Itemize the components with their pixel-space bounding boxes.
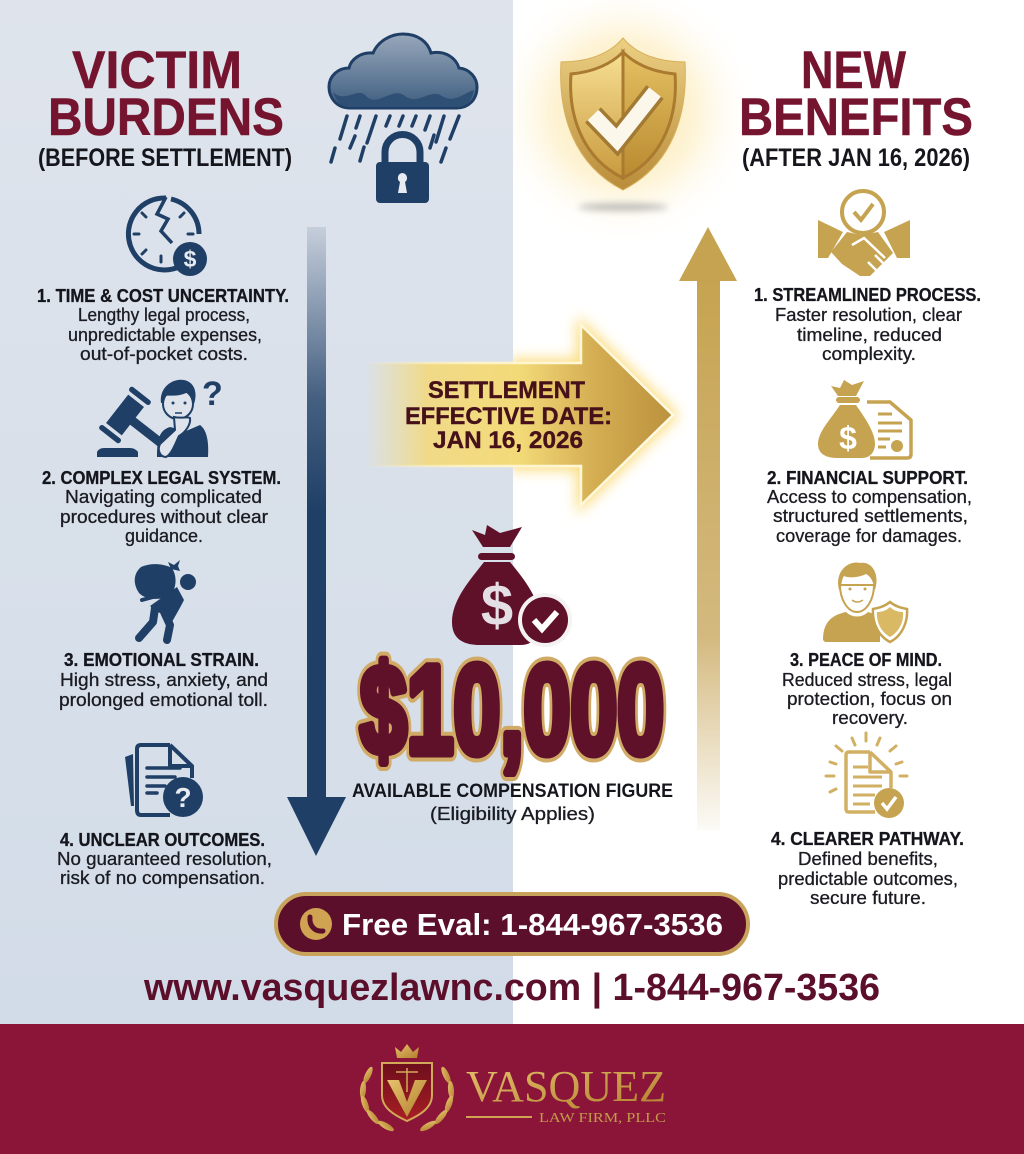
caption: compensation figure [352, 781, 673, 824]
item 4: clearer pathway: secure future. [810, 888, 926, 908]
item 1: time and cost uncertainty: Lengthy legal process, [78, 305, 250, 325]
heading: victim burdens [38, 41, 292, 172]
website and phone: www.vasquezlawnc.com | 1-844-967-3536 [143, 967, 880, 1009]
icon: broken clock with dollar: $ [184, 246, 197, 272]
icon: gold shield glow [516, 5, 730, 220]
icon: gavel and confused person [97, 375, 223, 465]
item 1: time and cost uncertainty [37, 286, 289, 364]
heading: new benefits: (AFTER JAN 16, 2026) [742, 144, 970, 172]
item 1: streamlined process [754, 285, 981, 364]
arrow: settlement effective date [365, 325, 673, 505]
item 4: unclear outcomes [57, 830, 272, 888]
logo: vasquez law firm emblem [359, 1044, 455, 1133]
item 3: peace of mind: 3. PEACE OF MIND. [790, 650, 942, 670]
item 2: financial support [767, 468, 972, 546]
item 2: financial support: coverage for damages. [776, 526, 962, 546]
panel background: before settlement [0, 0, 513, 1024]
item 4: clearer pathway: 4. CLEARER PATHWAY. [771, 829, 964, 849]
item 3: emotional strain [59, 650, 268, 710]
figure: $10,000: $10,000 [360, 641, 664, 780]
heading: new benefits: BENEFITS [739, 88, 973, 147]
item 2: complex legal system: Navigating complicated [65, 487, 262, 507]
item 2: complex legal system [42, 468, 281, 546]
item 2: financial support: structured settlements, [773, 506, 968, 526]
icon: money bag and document: $ [839, 420, 857, 456]
arrow: descending navy arrow [287, 227, 346, 856]
item 3: peace of mind: protection, focus on [787, 689, 952, 709]
icon: gold shield with check [561, 38, 685, 190]
item 3: emotional strain: High stress, anxiety, and [60, 670, 268, 690]
item 2: complex legal system: procedures without clear [60, 507, 268, 527]
caption: compensation figure: AVAILABLE COMPENSATION FIGURE [352, 781, 673, 802]
item 3: emotional strain: prolonged emotional toll. [59, 690, 268, 710]
icon: gavel and confused person: ? [202, 375, 223, 413]
heading: victim burdens: BURDENS [48, 88, 284, 147]
item 2: complex legal system: guidance. [125, 526, 203, 546]
logo: firm name: VASQUEZ [466, 1062, 666, 1111]
item 4: clearer pathway [771, 829, 964, 908]
item 1: time and cost uncertainty: 1. TIME & COST UNCERTAINTY. [37, 286, 289, 306]
logo: firm name: LAW FIRM, PLLC [539, 1111, 666, 1126]
item 1: streamlined process: Faster resolution, clear [775, 305, 962, 325]
arrow: settlement effective date: EFFECTIVE DATE: [405, 403, 612, 430]
icon: broken clock with dollar [128, 197, 207, 276]
arrow: settlement date glow [513, 325, 673, 505]
item 3: emotional strain: 3. EMOTIONAL STRAIN. [64, 650, 259, 670]
icon: person with shield [823, 562, 907, 642]
item 1: streamlined process: complexity. [822, 344, 916, 364]
item 3: peace of mind [782, 650, 952, 728]
heading: new benefits: NEW [801, 41, 906, 100]
item 2: financial support: 2. FINANCIAL SUPPORT. [767, 468, 968, 488]
icon: rain cloud and padlock [329, 34, 477, 203]
item 1: streamlined process: timeline, reduced [797, 325, 942, 345]
icon: money bag and document [818, 380, 911, 458]
item 4: unclear outcomes: No guaranteed resolution, [57, 849, 272, 869]
item 4: clearer pathway: predictable outcomes, [778, 869, 958, 889]
button: free evaluation phone number [276, 894, 748, 954]
item 2: complex legal system: 2. COMPLEX LEGAL SYSTEM. [42, 468, 281, 488]
item 3: peace of mind: recovery. [832, 708, 908, 728]
item 3: peace of mind: Reduced stress, legal [782, 670, 952, 690]
heading: victim burdens: (BEFORE SETTLEMENT) [38, 144, 292, 172]
icon: money bag with check [452, 525, 572, 647]
panel background: after settlement [513, 0, 1024, 1024]
heading: new benefits [739, 41, 973, 172]
item 1: time and cost uncertainty: out-of-pocket costs. [80, 344, 248, 364]
figure: $10,000: $10,000 [360, 641, 664, 780]
footer band [0, 1024, 1024, 1154]
arrow: settlement effective date: JAN 16, 2026 [433, 427, 583, 454]
heading: victim burdens: VICTIM [72, 41, 242, 100]
icon: clock and handshake [818, 191, 910, 276]
icon: money bag with check: $ [481, 573, 513, 638]
icon: document with question mark [125, 745, 203, 817]
icon: document with question mark: ? [174, 782, 192, 813]
item 1: streamlined process: 1. STREAMLINED PROCESS. [754, 285, 981, 305]
item 4: unclear outcomes: risk of no compensation. [60, 868, 265, 888]
button: free evaluation phone number: Free Eval: 1-844-967-3536 [342, 907, 723, 942]
item 4: unclear outcomes: 4. UNCLEAR OUTCOMES. [60, 830, 265, 850]
arrow: settlement effective date: SETTLEMENT [428, 377, 585, 404]
figure: $10,000 [360, 641, 664, 780]
icon: document with check and rays [826, 733, 907, 818]
item 1: time and cost uncertainty: unpredictable expenses, [68, 325, 262, 345]
icon: person carrying heavy sack [135, 560, 196, 640]
arrow: rising gold arrow [679, 227, 737, 830]
item 2: financial support: Access to compensation, [767, 487, 972, 507]
item 4: clearer pathway: Defined benefits, [798, 849, 938, 869]
caption: compensation figure: (Eligibility Applies) [430, 804, 595, 824]
